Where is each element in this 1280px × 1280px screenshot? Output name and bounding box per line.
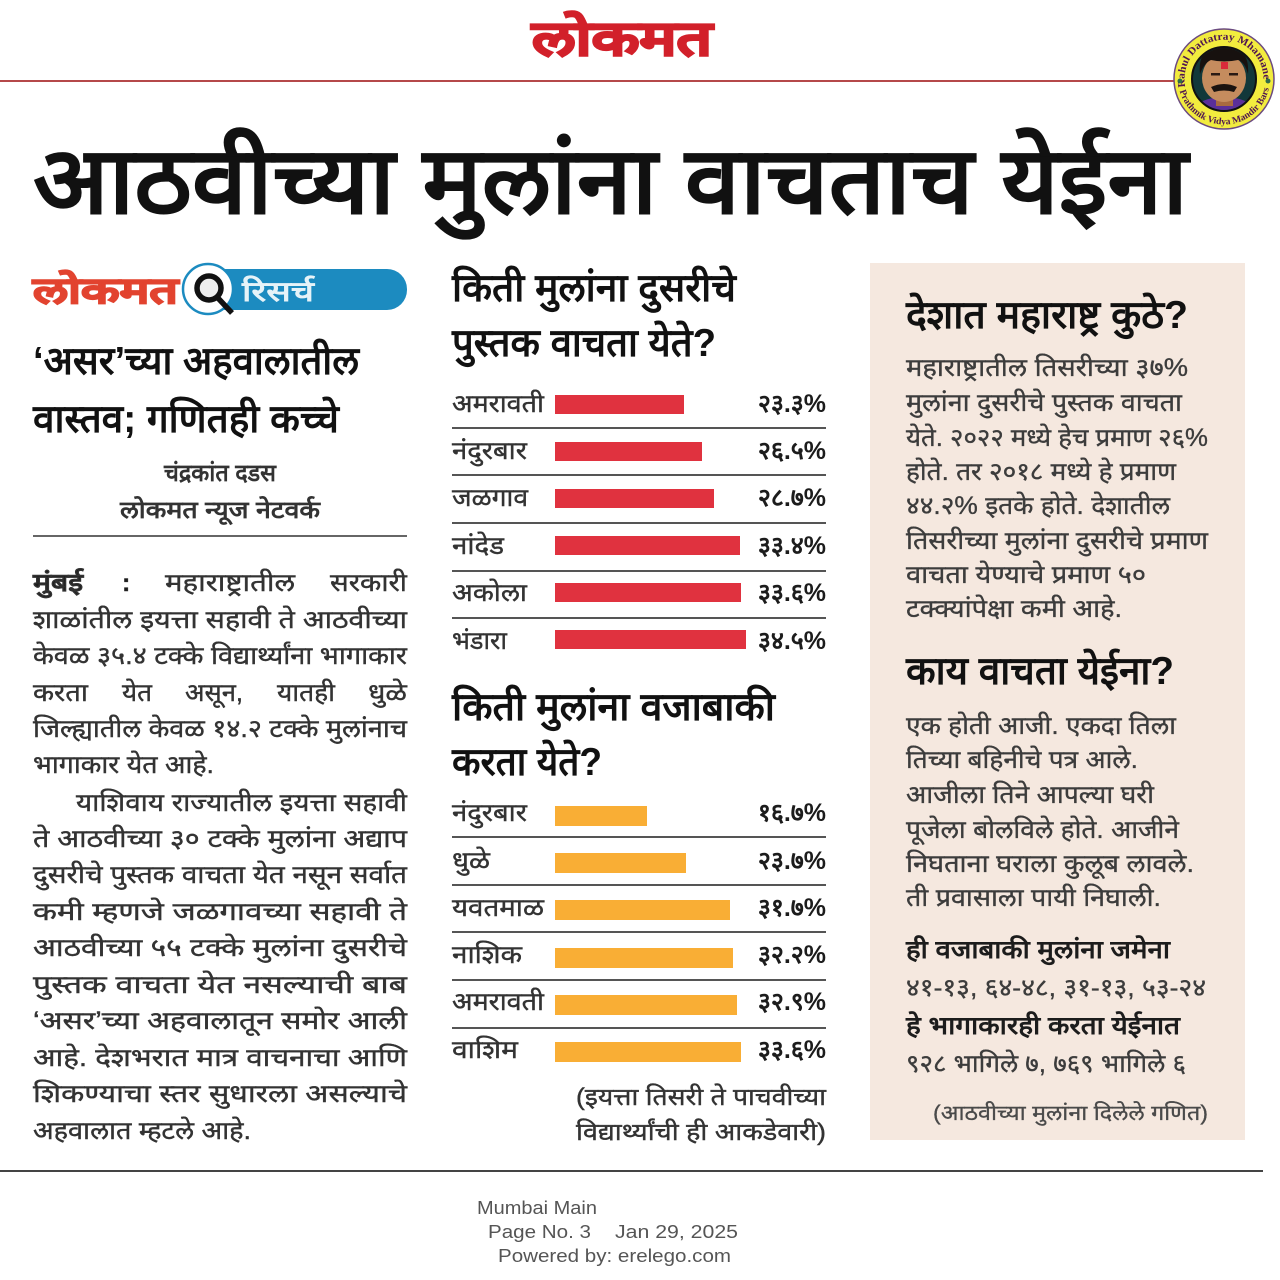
article body text: असून,: [185, 679, 243, 708]
bar chart: reading: ३३.४%: [758, 532, 826, 560]
main headline: आठवीच्या मुलांना वाचताच येईना: [33, 127, 1192, 240]
bar chart: subtraction: अमरावती: [452, 987, 545, 1016]
byline: [119, 460, 322, 526]
bar chart: subtraction: ३३.६%: [758, 1036, 826, 1064]
article body text: सरकारी: [330, 568, 408, 597]
chart heading: second-standard reading: [451, 265, 737, 368]
bar chart: reading: ३३.६%: [758, 579, 826, 607]
article body text: :: [122, 569, 130, 597]
article body text: ते आठवीच्या ३० टक्के मुलांना अद्याप: [33, 824, 408, 854]
footer text: Powered by: erelego.com: [498, 1245, 731, 1266]
chart heading: second-standard reading: किती मुलांना दुसरीचे: [451, 265, 737, 313]
panel paragraph: वाचता येण्याचे प्रमाण ५०: [906, 560, 1146, 589]
byline: लोकमत न्यूज नेटवर्क: [119, 496, 322, 526]
bar chart: subtraction: नंदुरबार: [452, 799, 528, 829]
article body text: ‘असर’च्या अहवालातून समोर आली: [33, 1006, 408, 1036]
article body text: धुळे: [368, 678, 408, 708]
bar chart: reading: [452, 389, 826, 655]
bar chart: reading: नांदेड: [452, 531, 505, 560]
panel paragraph: टक्क्यांपेक्षा कमी आहे.: [906, 594, 1122, 623]
masthead rule: [0, 80, 1178, 82]
article headline: ‘असर’च्या अहवालातील: [33, 338, 361, 383]
article body text: मुंबई: [32, 568, 85, 599]
story paragraph: आजीला तिने आपल्या घरी: [906, 780, 1155, 809]
panel heading: what can't they read: काय वाचता येईना?: [905, 648, 1174, 693]
maths problems: ४१-१३, ६४-४८, ३१-१३, ५३-२४: [906, 974, 1206, 1002]
article body text: केवळ ३५.४ टक्के विद्यार्थ्यांना भागाकार: [33, 641, 408, 670]
bar chart: reading: २३.३%: [758, 390, 826, 418]
chart heading: subtraction: किती मुलांना वजाबाकी: [451, 684, 777, 732]
footer text: Jan 29, 2025: [615, 1221, 738, 1242]
article body text: [32, 568, 408, 1145]
panel paragraph: मुलांना दुसरीचे पुस्तक वाचता: [906, 388, 1183, 419]
article body text: महाराष्ट्रातील: [165, 568, 296, 597]
bar chart: reading: ३४.५%: [758, 627, 826, 655]
bar chart: subtraction: [452, 799, 826, 1064]
bar chart: reading: भंडारा: [452, 627, 508, 655]
byline: चंद्रकांत दडस: [163, 460, 277, 487]
panel paragraph: तिसरीच्या मुलांना दुसरीचे प्रमाण: [906, 526, 1209, 557]
article body text: याशिवाय राज्यातील इयत्ता सहावी: [76, 788, 408, 817]
panel heading: देशात महाराष्ट्र कुठे?: [905, 292, 1188, 340]
chart heading: second-standard reading: पुस्तक वाचता येते?: [451, 320, 716, 368]
maths problems: [905, 935, 1206, 1078]
panel paragraph: महाराष्ट्रातील तिसरीच्या ३७%: [906, 353, 1188, 382]
panel paragraph: ४४.२% इतके होते. देशातील: [906, 491, 1171, 520]
bar chart: reading: नंदुरबार: [452, 437, 528, 467]
article body text: कमी म्हणजे जळगावच्या सहावी ते: [33, 897, 408, 926]
chart footnote: विद्यार्थ्यांची ही आकडेवारी): [576, 1118, 826, 1146]
bar chart: subtraction: ३२.२%: [758, 941, 826, 969]
story paragraph: एक होती आजी. एकदा तिला: [906, 711, 1177, 740]
article body text: दुसरीचे पुस्तक वाचता येत नसून सर्वात: [33, 860, 408, 891]
panel: Maharashtra in the country: [870, 263, 1245, 1140]
article body text: येत: [122, 678, 153, 707]
bar chart: reading: अमरावती: [452, 389, 545, 418]
article headline: वास्तव; गणितही कच्चे: [32, 396, 340, 441]
article body text: पुस्तक वाचता येत नसल्याची बाब: [33, 970, 408, 1000]
article body text: आहे. देशभरात मात्र वाचनाचा आणि: [33, 1043, 408, 1072]
bar chart: subtraction: ३१.७%: [758, 894, 826, 922]
story paragraph: ती प्रवासाला पायी निघाली.: [906, 883, 1161, 912]
story paragraph: निघताना घराला कुलूब लावले.: [906, 849, 1194, 879]
chart footnote: [576, 1083, 827, 1146]
bar chart: subtraction: ३२.९%: [758, 988, 826, 1016]
article headline: [32, 338, 361, 441]
article body text: अहवालात म्हटले आहे.: [33, 1116, 251, 1145]
bar chart: subtraction: २३.७%: [758, 847, 826, 875]
chart heading: subtraction: करता येते?: [451, 739, 602, 784]
footer text: Mumbai Main: [477, 1197, 597, 1218]
article body text: शाळांतील इयत्ता सहावी ते आठवीच्या: [33, 605, 408, 634]
chart footnote: (इयत्ता तिसरी ते पाचवीच्या: [576, 1083, 827, 1111]
research banner: लोकमत: [32, 270, 180, 311]
bar chart: subtraction: यवतमाळ: [452, 894, 545, 922]
badge: Rahul Dattatray Mhamane: Rahul Dattatray Mhamane: [1178, 34, 1268, 88]
story paragraph: तिच्या बहिनीचे पत्र आले.: [906, 745, 1138, 774]
maths problems: ही वजाबाकी मुलांना जमेना: [905, 935, 1172, 966]
masthead logo: लोकमत: [531, 11, 714, 66]
article body text: जिल्ह्यातील केवळ १४.२ टक्के मुलांनाच: [33, 714, 408, 744]
footer text: [477, 1197, 738, 1266]
bar chart: reading: अकोला: [452, 578, 528, 607]
article body text: शिकण्याचा स्तर सुधारला असल्याचे: [33, 1079, 408, 1109]
article body text: भागाकार येत आहे.: [33, 750, 214, 779]
panel paragraph: येते. २०२२ मध्ये हेच प्रमाण २६%: [906, 423, 1208, 452]
bar chart: subtraction: १६.७%: [758, 799, 826, 827]
bar chart: subtraction: नाशिक: [452, 940, 523, 969]
article body text: करता: [33, 679, 89, 707]
article body text: यातही: [277, 678, 336, 707]
bar chart: reading: २६.५%: [758, 437, 826, 465]
bar chart: reading: २८.७%: [758, 484, 826, 512]
panel footnote: (आठवीच्या मुलांना दिलेले गणित): [933, 1101, 1208, 1126]
byline rule: [33, 535, 407, 537]
chart heading: subtraction: [451, 684, 777, 784]
bar chart: subtraction: धुळे: [452, 846, 491, 876]
maths problems: हे भागाकारही करता येईनात: [905, 1011, 1182, 1040]
story paragraph: [906, 711, 1194, 912]
maths problems: ९२८ भागिले ७, ७६९ भागिले ६: [906, 1049, 1186, 1078]
footer rule: [0, 1170, 1263, 1172]
article body text: आठवीच्या ५५ टक्के मुलांना दुसरीचे: [33, 933, 408, 964]
footer text: Page No. 3: [488, 1221, 591, 1242]
badge: Rahul Dattatray Mhamane: [1173, 28, 1275, 130]
bar chart: reading: जळगाव: [452, 484, 529, 512]
panel paragraph: होते. तर २०१८ मध्ये हे प्रमाण: [906, 457, 1177, 486]
research banner: रिसर्च: [241, 275, 316, 307]
panel paragraph: [906, 353, 1209, 623]
bar chart: subtraction: वाशिम: [452, 1035, 519, 1064]
story paragraph: पूजेला बोलविले होते. आजीने: [906, 815, 1180, 845]
research banner: [32, 264, 407, 314]
